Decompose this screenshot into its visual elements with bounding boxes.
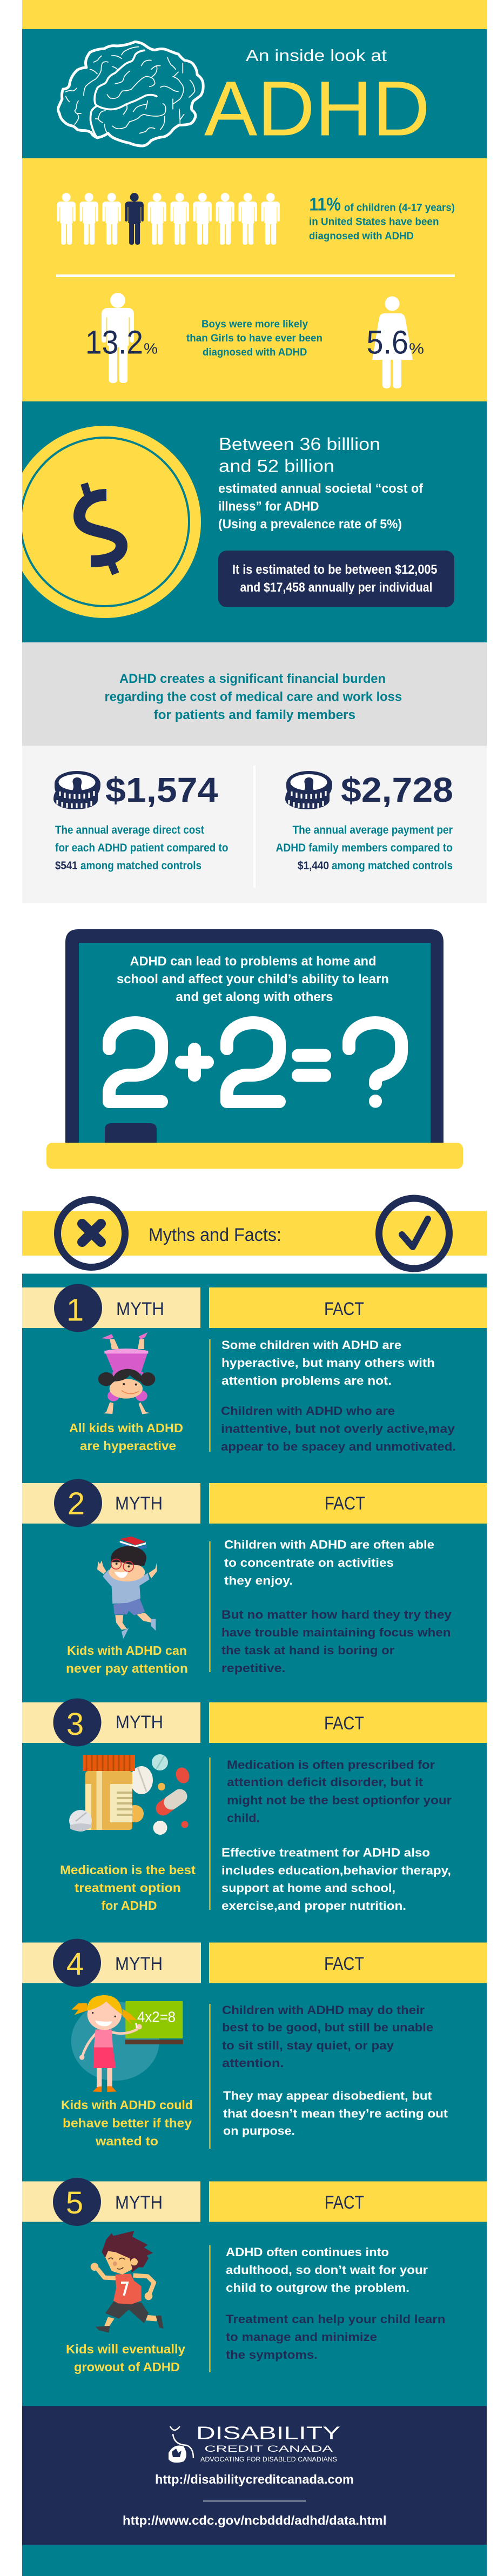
fact 2 text: have trouble maintaining focus when: [221, 1626, 451, 1639]
myth 3: FACT: [324, 1713, 364, 1734]
fact 2 text: the task at hand is boring or: [221, 1643, 394, 1657]
illustration: running boy: [91, 2231, 164, 2333]
fact 4 text: They may appear disobedient, but: [223, 2089, 432, 2103]
myth 4: [22, 1938, 487, 2149]
fact 3 text: Effective treatment for ADHD also: [221, 1846, 430, 1860]
text: direct cost: [55, 824, 228, 872]
text: between 36 and 52 billion: Between 36 billlion: [219, 434, 380, 454]
panel: prevalence statistics: [22, 158, 487, 401]
caption: myth 5: growout of ADHD: [74, 2360, 180, 2374]
panel: financial burden heading: regarding the cost of medical care and work loss: [105, 689, 402, 705]
myth 4: FACT: [324, 1954, 364, 1974]
panel: cost of illness: [9, 401, 487, 642]
fact 1 text: [221, 1338, 456, 1453]
fact 5 text: Treatment can help your child learn: [226, 2312, 445, 2326]
fact 4 text: [222, 2003, 448, 2137]
text: estimated societal cost: (Using a prevalence rate of 5%): [218, 517, 402, 532]
icon: dollar coin: [9, 426, 201, 618]
fact 4 text: attention.: [222, 2056, 284, 2070]
panel: bottom band: [22, 2545, 487, 2576]
myth 4: 4: [66, 1947, 84, 1982]
illustration: girl at blackboard: [71, 1995, 183, 2092]
fact 3 text: support at home and school,: [221, 1881, 395, 1895]
text: boys more likely than girls: than Girls to have ever been: [186, 333, 322, 344]
icon: boy figure: [102, 293, 134, 383]
myth 1: [22, 1284, 487, 1453]
myth 2: 2: [68, 1486, 85, 1521]
callout: per individual estimate: It is estimated to be between $12,005: [232, 562, 438, 577]
text: problems at home and school: school and affect your child’s ability to learn: [117, 972, 389, 987]
text: 11 percent of children: 11%: [309, 194, 341, 215]
panel: footer: [22, 2406, 487, 2545]
fact 5 text: child to outgrow the problem.: [226, 2281, 409, 2295]
panel: financial burden heading: ADHD creates a significant financial burden: [119, 672, 386, 686]
caption: myth 4: [61, 2098, 193, 2148]
myth 4: MYTH: [115, 1954, 163, 1974]
fact 3 text: [221, 1758, 452, 1913]
myth 2: FACT: [325, 1493, 365, 1514]
fact 1 text: hyperactive, but many others with: [221, 1356, 435, 1370]
fact 2 text: repetitive.: [221, 1661, 285, 1675]
fact 2 text: But no matter how hard they try they: [221, 1608, 452, 1621]
caption: myth 3: Medication is the best: [60, 1863, 196, 1877]
fact 1 text: appear to be spacey and unmotivated.: [221, 1440, 456, 1453]
text: boys more likely than girls: Boys were more likely: [201, 319, 308, 330]
text: family payment: among matched controls: [332, 860, 453, 872]
text: logo wordmark: CREDIT CANADA: [204, 2444, 333, 2454]
fact 3 text: includes education,behavior therapy,: [221, 1864, 451, 1877]
stat: boys 13.2 percent: %: [144, 340, 158, 357]
text: family payment: $1,440: [298, 860, 329, 872]
panel: financial burden heading: [22, 642, 487, 746]
illustration: pill bottle and pills: [69, 1754, 191, 1835]
text: direct cost: among matched controls: [80, 860, 201, 872]
callout: per individual estimate: [218, 551, 454, 607]
fact 4 text: that doesn’t mean they’re acting out: [223, 2107, 448, 2120]
icon: cross in circle: [57, 1199, 125, 1267]
myth 5: 5: [66, 2185, 83, 2221]
text: 11 percent of children: diagnosed with ADHD: [309, 231, 414, 242]
myth 5: FACT: [325, 2192, 364, 2213]
heading: myths and facts: [22, 1198, 487, 1269]
text: problems at home and school: ADHD can lead to problems at home and: [130, 954, 376, 969]
text: 11 percent of children: of children (4-17 years): [344, 202, 455, 214]
fact 4 text: Children with ADHD may do their: [222, 2003, 425, 2017]
caption: myth 5: Kids will eventually: [66, 2342, 185, 2356]
caption: myth 3: [60, 1863, 196, 1913]
fact 1 text: Some children with ADHD are: [221, 1338, 401, 1352]
text: estimated societal cost: illness” for ADHD: [218, 499, 319, 514]
myth 3: [22, 1699, 487, 1913]
text: estimated societal cost: estimated annual societal “cost of: [218, 481, 424, 496]
myth 1: 1: [66, 1292, 84, 1328]
icon: eraser: [105, 1123, 157, 1143]
text: family payment: ADHD family members compared to: [275, 842, 453, 854]
fact 3 text: might not be the best optionfor your: [227, 1794, 452, 1807]
fact 5 text: to manage and minimize: [226, 2330, 377, 2344]
text: logo wordmark: [196, 2423, 340, 2463]
myth 2: MYTH: [115, 1493, 163, 1514]
text: problems at home and school: [117, 954, 389, 1004]
myth 3: MYTH: [116, 1712, 163, 1733]
text: family payment: [275, 824, 453, 872]
text: family payment: The annual average payment per: [293, 824, 453, 836]
fact 2 text: to concentrate on activities: [224, 1556, 394, 1569]
text: 11 percent of children: in United States have been: [309, 217, 439, 228]
illustration: boy with books on head: [97, 1537, 157, 1639]
text: logo wordmark: DISABILITY: [196, 2423, 340, 2443]
link: cdc data: http://www.cdc.gov/ncbddd/adhd/data.html: [123, 2513, 387, 2527]
heading: An inside look at: An inside look at: [246, 46, 387, 65]
text: estimated societal cost: [218, 481, 424, 532]
fact 4 text: on purpose.: [223, 2124, 295, 2137]
panel: title header background: [22, 0, 487, 29]
illustration: girl at blackboard: 4x2=8: [137, 2008, 176, 2025]
caption: myth 2: never pay attention: [66, 1661, 188, 1675]
text: logo wordmark: ADVOCATING FOR DISABLED CANADIANS: [200, 2456, 337, 2463]
caption: myth 1: [69, 1421, 183, 1453]
icon: coin stack left: [53, 771, 100, 809]
fact 5 text: the symptoms.: [226, 2348, 318, 2362]
icon: 2+2=? equation: [109, 1023, 401, 1102]
caption: myth 1: All kids with ADHD: [69, 1421, 183, 1435]
text: between 36 and 52 billion: [219, 434, 380, 475]
fact 5 text: adulthood, so don’t wait for your: [226, 2263, 428, 2277]
myth 3: 3: [66, 1707, 84, 1742]
myth 1: MYTH: [116, 1299, 164, 1319]
fact 3 text: Medication is often prescribed for: [227, 1758, 435, 1772]
fact 1 text: attention problems are not.: [221, 1374, 392, 1387]
caption: myth 4: wanted to: [95, 2134, 158, 2148]
fact 3 text: attention deficit disorder, but it: [227, 1775, 424, 1789]
fact 2 text: they enjoy.: [224, 1574, 293, 1587]
illustration: chalkboard: [46, 929, 463, 1169]
icon: chalk ledge: [46, 1143, 463, 1169]
heading: ADHD: ADHD: [204, 65, 430, 152]
panel: title: [22, 29, 487, 159]
panel: annual costs: [22, 746, 487, 903]
icon: coin stack right: [285, 771, 332, 809]
text: boys more likely than girls: diagnosed with ADHD: [203, 347, 307, 358]
myth 5: [22, 2178, 487, 2374]
fact 1 text: Children with ADHD who are: [221, 1404, 395, 1418]
fact 5 text: ADHD often continues into: [226, 2245, 389, 2259]
stat: boys 13.2 percent: 13.2: [85, 324, 143, 361]
panel: financial burden heading: for patients and family members: [153, 708, 355, 722]
icon: check in circle: [379, 1198, 449, 1269]
text: direct cost: for each ADHD patient compared to: [55, 842, 228, 854]
panel: myths and facts background: [22, 1274, 487, 2406]
text: between 36 and 52 billion: and 52 billion: [219, 456, 334, 475]
icon: logo deer and maple leaf: [169, 2426, 193, 2463]
text: 11 percent of children: [309, 194, 455, 242]
heading: myths and facts: Myths and Facts:: [149, 1225, 281, 1245]
stat: girls 5.6 percent: %: [409, 340, 424, 357]
fact 5 text: [226, 2245, 445, 2362]
illustration: girl doing handstand: [98, 1332, 155, 1414]
icon: brain: [58, 42, 203, 146]
caption: myth 4: Kids with ADHD could: [61, 2098, 193, 2112]
caption: myth 2: Kids with ADHD can: [67, 1643, 187, 1658]
myth 5: MYTH: [115, 2192, 163, 2213]
caption: myth 5: [66, 2342, 185, 2374]
fact 2 text: [221, 1538, 452, 1675]
text: direct cost: $541: [55, 860, 78, 872]
stat: 1,574 dollars: $1,574: [105, 770, 218, 809]
text: boys more likely than girls: [186, 319, 322, 358]
myth 1: FACT: [324, 1299, 364, 1319]
callout: per individual estimate: and $17,458 annually per individual: [240, 580, 432, 595]
caption: myth 3: for ADHD: [102, 1899, 157, 1913]
fact 3 text: exercise,and proper nutrition.: [221, 1899, 406, 1913]
link: disability credit canada: http://disabilitycreditcanada.com: [155, 2472, 354, 2486]
fact 2 text: Children with ADHD are often able: [224, 1538, 434, 1552]
chart: 1 in 10 people pictogram: [57, 193, 280, 245]
caption: myth 2: [66, 1643, 188, 1675]
fact 4 text: to sit still, stay quiet, or pay: [222, 2039, 394, 2052]
text: direct cost: The annual average direct cost: [55, 824, 204, 836]
icon: girl figure: [372, 296, 413, 388]
fact 1 text: inattentive, but not overly active,may: [221, 1422, 455, 1435]
caption: myth 4: behave better if they: [63, 2116, 192, 2130]
fact 3 text: child.: [227, 1811, 260, 1825]
caption: myth 1: are hyperactive: [80, 1439, 176, 1453]
myth 2: [22, 1479, 487, 1675]
stat: girls 5.6 percent: 5.6: [366, 324, 408, 361]
stat: 2,728 dollars: $2,728: [341, 770, 453, 809]
caption: myth 3: treatment option: [75, 1881, 181, 1895]
text: problems at home and school: and get along with others: [176, 990, 333, 1004]
fact 4 text: best to be good, but still be unable: [222, 2021, 433, 2034]
